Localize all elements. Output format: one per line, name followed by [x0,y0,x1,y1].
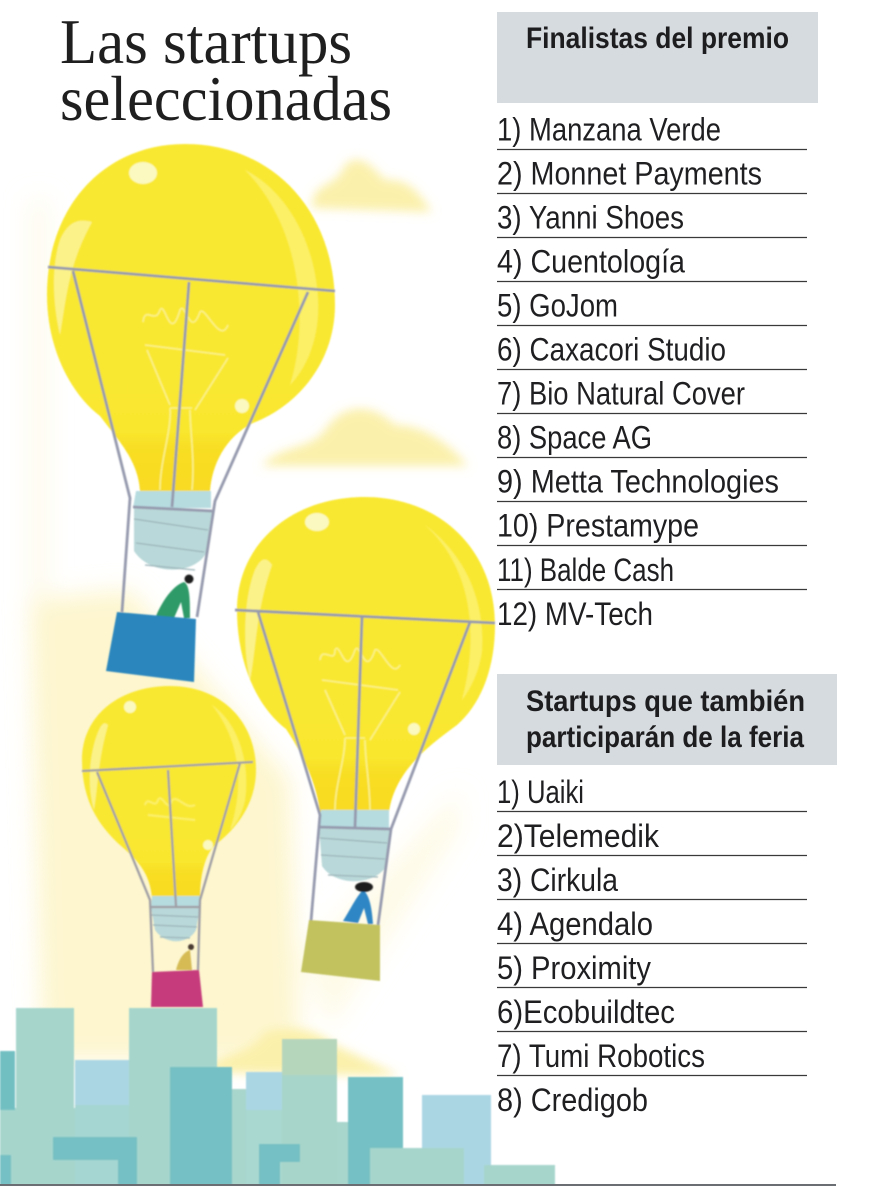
person in magenta basket [176,950,192,970]
balloon: large yellow bulb with blue basket [47,144,335,682]
title: Las startups [60,7,352,77]
finalists list: 1) Manzana Verde [497,112,721,148]
person in blue basket [156,582,190,618]
participants header: Startups que también [526,685,805,718]
participants list: 2)Telemedik [497,818,660,854]
finalists list: 6) Caxacori Studio [497,332,726,368]
finalists list [497,112,807,632]
title [60,7,392,134]
participants list [497,774,807,1118]
participants list: 8) Credigob [497,1082,648,1118]
balloon: small yellow bulb with magenta basket [82,686,256,1007]
clouds [200,160,468,1076]
participants list: 4) Agendalo [497,906,653,942]
finalists list: 12) MV-Tech [497,596,653,632]
finalists header: Finalistas del premio [526,22,789,55]
finalists list: 11) Balde Cash [497,552,674,588]
balloon: medium yellow bulb with olive basket [235,497,495,981]
participants header [497,674,837,765]
title: seleccionadas [60,64,392,134]
city skyline [0,1008,555,1185]
panel: finalists [497,12,818,632]
finalists list: 4) Cuentología [497,244,685,280]
baseline rule [0,1184,836,1186]
background haze [30,200,460,1060]
panel: other participating startups [497,674,837,1118]
finalists list: 5) GoJom [497,288,618,324]
participants list: 6)Ecobuildtec [497,994,675,1030]
finalists list: 2) Monnet Payments [497,156,762,192]
participants list: 1) Uaiki [497,774,584,810]
participants header: participarán de la feria [526,721,804,754]
finalists header [497,12,818,103]
participants list: 3) Cirkula [497,862,618,898]
participants list: 5) Proximity [497,950,651,986]
finalists list: 10) Prestamype [497,508,699,544]
participants list: 7) Tumi Robotics [497,1038,705,1074]
person in olive basket [343,890,373,924]
finalists list: 9) Metta Technologies [497,464,779,500]
finalists list: 8) Space AG [497,420,652,456]
finalists list: 7) Bio Natural Cover [497,376,745,412]
finalists list: 3) Yanni Shoes [497,200,684,236]
